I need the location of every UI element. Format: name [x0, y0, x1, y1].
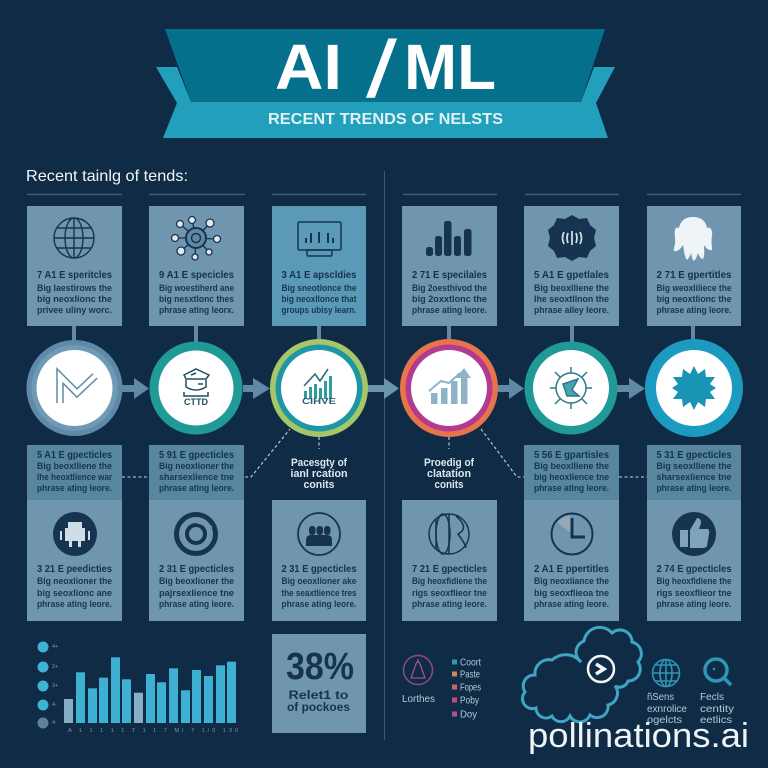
label: node 3 note: conits: [304, 479, 334, 491]
title: AI /ML: AI: [275, 31, 342, 103]
top card 5: Big beoxlliene the: [534, 283, 609, 293]
icon: virus ring: [550, 367, 592, 409]
legend icon: Lorthes: [402, 693, 435, 705]
node 6: [645, 339, 743, 437]
bottom card 2: phrase ating leore.: [159, 483, 234, 493]
label: node 4 note: Proedig of: [424, 457, 474, 469]
bottom card 1: 3 21 E peedicties: [37, 563, 112, 575]
top card 4: phrase ating leore.: [412, 305, 487, 315]
icon: rising bars: [429, 368, 471, 404]
bottom card 5: phrase ating leore.: [534, 599, 609, 609]
icon: badge: [548, 215, 596, 261]
top card 4: Big 2oesthivod the: [412, 283, 487, 293]
color legend: Fopes: [460, 682, 481, 694]
stat card: 38%: Relet1 to: [288, 688, 348, 702]
caption left: exnrolice: [647, 703, 687, 715]
icon: clock: [552, 514, 592, 554]
icon: hub network: [172, 216, 220, 260]
top card 4: [402, 206, 497, 326]
bars: [64, 657, 236, 723]
bottom card 1: phrase ating leore.: [37, 483, 112, 493]
bottom card 4: Big heoxfidiene the: [412, 576, 487, 586]
bottom card 3: 2 31 E gpecticles: [282, 563, 357, 575]
icon: monitor: [298, 222, 341, 256]
bottom card 2: sharsexlience tne: [159, 472, 234, 482]
top card 2: 9 A1 E specicles: [159, 269, 234, 281]
top card 6: 2 71 E gpertitles: [656, 269, 732, 281]
top card 3: big neoxllonce that: [282, 294, 356, 304]
node 3: [270, 339, 368, 437]
chart legend dots: 4-: [52, 720, 57, 726]
icon: starburst: [672, 366, 716, 410]
section heading: Recent tainlg of tends:: [26, 168, 188, 185]
caption right: [700, 691, 735, 726]
bottom card 3: the seaxtlience tres: [282, 588, 356, 598]
chart legend dots: [38, 642, 58, 728]
watermark: pollinations.ai: [528, 717, 749, 755]
chart legend dots: 4+: [52, 644, 58, 650]
top card 3: 3 A1 E apscldies: [282, 269, 357, 281]
bottom card 4: [402, 500, 497, 621]
arrow 5: [617, 378, 645, 399]
top card 4: 2 71 E specilales: [412, 269, 487, 281]
bottom card 6: [647, 445, 741, 621]
bottom card 5: [524, 445, 619, 621]
bottom card 2: 2 31 E gpecticles: [159, 563, 234, 575]
bottom card 6: phrase ating leore.: [656, 599, 732, 609]
bottom card 5: big heoxlience tne: [534, 472, 609, 482]
caption left: ogelcts: [647, 714, 682, 726]
bottom card 4: 7 21 E gpecticles: [412, 563, 487, 575]
label: node 3 note: ianl rcation: [290, 468, 348, 480]
bottom card 1: Big beoxlliene the: [37, 461, 112, 471]
title: AI /ML: /: [366, 25, 398, 115]
bottom card 4: rigs seoxflieor tne: [412, 588, 487, 598]
top card 6: big neoxtlionc the: [656, 294, 732, 304]
caption left: ñSens: [647, 691, 674, 703]
bottom card 6: rigs seoxflieor tne: [656, 588, 732, 598]
bottom card 1: [27, 445, 122, 621]
label: node 4 note: conits: [434, 479, 464, 491]
node 1: [26, 340, 122, 436]
icon: globe: [54, 218, 94, 258]
top card 6: [647, 206, 741, 326]
bottom card 5: 2 A1 E ppertitles: [534, 563, 609, 575]
icon: thumbs up: [672, 512, 716, 556]
top card 6: Big weoxliliece the: [656, 283, 732, 293]
icon: magnifier: [705, 659, 731, 685]
top card 1: [27, 206, 122, 326]
bottom card 5: Big beoxlliene the: [534, 461, 609, 471]
stat card: 38%: of pockoes: [287, 700, 350, 714]
caption right: centity: [700, 703, 735, 715]
stat card: 38%: [272, 634, 366, 733]
bottom card 4: phrase ating leore.: [412, 599, 487, 609]
top card 6: phrase ating leore.: [656, 305, 732, 315]
icon: box hat: CTTD: [184, 397, 208, 407]
top card 2: phrase ating leorx.: [159, 305, 234, 315]
icon: robot: [53, 512, 97, 556]
bottom card 2: pajrsexlience tne: [159, 588, 234, 598]
bottom card 1: Big neoxlioner the: [37, 576, 112, 586]
arrow 1: [122, 378, 149, 399]
color legend: Poby: [460, 694, 480, 706]
arrow 4: [497, 378, 524, 399]
bottom card 6: Big heoxfidiene the: [656, 576, 732, 586]
color legend: Paste: [460, 668, 480, 680]
color legend: Coort: [460, 656, 481, 668]
stat card: 38%: 38%: [286, 646, 354, 688]
title: AI /ML: ML: [404, 31, 496, 103]
top card 2: Big woestiherd ane: [159, 283, 234, 293]
bottom card 2: 5 91 E gpecticles: [159, 449, 234, 461]
bottom card 6: 2 74 E gpecticles: [656, 563, 732, 575]
top card 4: big 2oxxtlonc the: [412, 294, 487, 304]
bottom card 6: Big seoxlliene the: [656, 461, 732, 471]
top card 5: phrase ailey leore.: [534, 305, 609, 315]
icon: growth chart: CIHVE: [302, 396, 336, 406]
label: node 4 note: clatation: [427, 468, 471, 480]
top card 2: big nesxtlonc thes: [159, 294, 234, 304]
chart legend dots: 2+: [52, 664, 58, 670]
arrow 2: [243, 378, 270, 399]
top card 3: groups ubisy learn.: [282, 305, 356, 315]
color legend: [452, 656, 481, 720]
top card 3: Big sneotlonce the: [282, 283, 356, 293]
label: node 3 note: [290, 457, 348, 491]
label: node 4 note: [424, 457, 474, 491]
chart legend dots: 3+: [52, 683, 58, 689]
arrow 3: [367, 378, 399, 399]
top card 5: [524, 206, 619, 326]
legend icon: [402, 656, 435, 705]
bottom card 5: big seoxflieoa tne: [534, 588, 609, 598]
caption right: Fecls: [700, 691, 724, 703]
node 4: [400, 339, 498, 437]
label: node 3 note: Pacesgty of: [291, 457, 347, 469]
bar chart: [38, 642, 238, 734]
top card 5: Ihe seoxtllnon the: [534, 294, 609, 304]
top card 1: 7 A1 E speritcles: [37, 269, 112, 281]
title banner: [156, 25, 615, 138]
axis labels: A 1 1 1 1 1 T 1 1 7 MI 7 1/0 130: [68, 728, 238, 734]
bottom card 6: sharsexlience tne: [656, 472, 732, 482]
icon: play: [588, 656, 614, 682]
bottom card 5: 5 56 E gpartisles: [534, 449, 609, 461]
top card 1: Big Iaestirows the: [37, 283, 112, 293]
bottom card 3: phrase ating leore.: [282, 599, 356, 609]
top card 1: big neoxlionc the: [37, 294, 112, 304]
top card 3: [272, 206, 366, 326]
icon: globe small: [652, 660, 680, 686]
top card 2: [149, 206, 244, 326]
bottom card 6: phrase ating leore.: [656, 483, 732, 493]
bottom card 1: Ihe heoxtlience war: [37, 472, 112, 482]
bottom card 3: [272, 500, 366, 621]
bottom card 5: Big neoxliance the: [534, 576, 609, 586]
chart legend dots: 4-: [52, 702, 57, 708]
node 2: [150, 342, 242, 434]
color legend: Doy: [460, 708, 478, 720]
bottom card 5: phrase ating leore.: [534, 483, 609, 493]
bottom card 2: Big beoxlioner the: [159, 576, 234, 586]
bottom card 6: 5 31 E gpecticles: [656, 449, 732, 461]
cloud with play button: [522, 627, 641, 722]
title: AI /ML: [275, 25, 496, 115]
bottom card 2: [149, 445, 244, 621]
caption left: [647, 691, 687, 726]
bottom card 2: phrase ating leore.: [159, 599, 234, 609]
icon: white creature: [674, 217, 712, 261]
caption right: eetlics: [700, 714, 732, 726]
top card 1: privee uliny worc.: [37, 305, 112, 315]
node 5: [524, 342, 618, 434]
bottom card 3: Big oeoxlioner ake: [282, 576, 356, 586]
top card 5: 5 A1 E gpetlales: [534, 269, 609, 281]
bottom card 1: big seoxlionc ane: [37, 588, 112, 598]
subtitle: RECENT TRENDS OF NELSTS: [268, 111, 503, 128]
icon: people: [298, 513, 340, 555]
icon: tilted globe: [429, 514, 469, 554]
icon: ring target: [176, 514, 216, 554]
icon: bar chart: [426, 221, 472, 256]
bottom card 1: phrase ating leore.: [37, 599, 112, 609]
bottom card 2: Big neoxlioner the: [159, 461, 234, 471]
icon: M mark: [60, 376, 95, 403]
bottom card 1: 5 A1 E gpecticles: [37, 449, 112, 461]
